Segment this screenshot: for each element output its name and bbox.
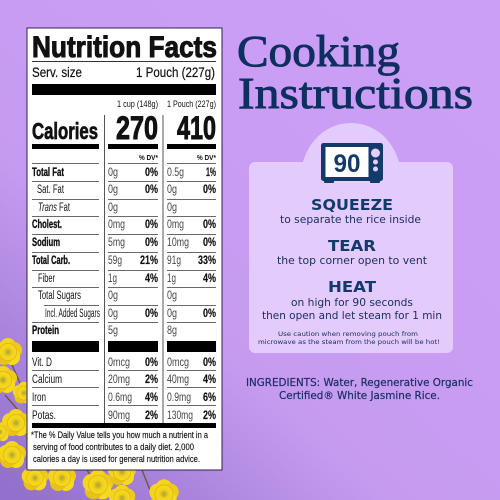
step: tear: the top corner open to vent <box>277 255 427 267</box>
percent: cup column: 0% <box>145 184 158 196</box>
nutrient labels <box>32 167 100 422</box>
step: squeeze: to separate the rice inside <box>280 214 421 226</box>
nutrient labels: Total Sugars <box>38 290 81 302</box>
amounts: pouch column: 10mg <box>167 237 189 249</box>
percent: pouch column: 2% <box>203 410 216 422</box>
amounts: cup column: 5g <box>108 325 118 337</box>
amounts: pouch column: 1g <box>167 273 176 285</box>
step: tear <box>277 237 427 267</box>
amounts: pouch column: 0.9mg <box>167 392 191 404</box>
panel: nutrition facts <box>27 28 222 470</box>
amounts: cup column: 59g <box>108 255 122 267</box>
daily value header: % DV* <box>197 153 216 162</box>
percent: pouch column: 0% <box>203 219 216 231</box>
icon: microwave <box>321 143 383 183</box>
serving size: Serv. size <box>32 64 82 80</box>
amounts: pouch column: 0mcg <box>167 357 189 369</box>
daily value header: % DV* <box>139 153 158 162</box>
step: tear: TEAR <box>328 237 376 255</box>
amounts: cup column: 0g <box>108 308 118 320</box>
percent: pouch column: 33% <box>198 255 216 267</box>
percent: pouch column: 0% <box>203 357 216 369</box>
percent: cup column: 4% <box>145 392 158 404</box>
amounts: cup column: 0g <box>108 290 118 302</box>
nutrient labels: Cholest. <box>32 219 62 231</box>
ingredients: Certified® White Jasmine Rice. <box>279 390 440 402</box>
percent: pouch column: 4% <box>203 374 216 386</box>
amounts: cup column: 1g <box>108 273 117 285</box>
step: heat: HEAT <box>328 278 376 296</box>
amounts: pouch column: 8g <box>167 325 177 337</box>
calories row: 410 <box>177 110 216 146</box>
percent: cup column: 4% <box>145 273 158 285</box>
icon: microwave: 90 <box>334 150 360 178</box>
percent: pouch column: 0% <box>203 184 216 196</box>
percent: cup column: 0% <box>145 357 158 369</box>
nutrient labels: Iron <box>32 392 46 404</box>
footnote <box>31 430 209 465</box>
amounts: pouch column: 0g <box>167 290 177 302</box>
flowers <box>0 338 179 500</box>
percent: cup column: 21% <box>140 255 158 267</box>
column headers: 1 Pouch (227g) <box>167 99 216 110</box>
percent: cup column: 0% <box>145 167 158 179</box>
amounts: pouch column: 130mg <box>167 410 193 422</box>
amounts: cup column: 0g <box>108 167 118 179</box>
percent: cup column: 2% <box>145 410 158 422</box>
calories row: 270 <box>116 110 158 146</box>
black divider bars <box>32 341 216 428</box>
percent: pouch column: 0% <box>203 308 216 320</box>
percent: cup column: 0% <box>145 308 158 320</box>
title: cooking instructions: Instructions <box>238 69 473 118</box>
serving size <box>32 64 215 80</box>
amounts: pouch column: 0.5g <box>167 167 184 179</box>
step: squeeze: SQUEEZE <box>311 196 393 214</box>
percent: pouch column: 6% <box>203 392 216 404</box>
percent: pouch column: 0% <box>203 237 216 249</box>
column headers: 1 cup (148g) <box>117 99 158 110</box>
title: cooking instructions: Cooking <box>237 27 400 76</box>
amounts: cup column: 0.6mg <box>108 392 132 404</box>
amounts: pouch column: 40mg <box>167 374 189 386</box>
serving size: 1 Pouch (227g) <box>136 64 215 80</box>
ingredients: INGREDIENTS: Water, Regenerative Organic <box>246 377 473 389</box>
footnote: calories a day is used for general nutrition advice. <box>33 454 200 465</box>
caution note: microwave as the steam from the pouch will be hot! <box>258 338 440 346</box>
row rules <box>32 163 216 406</box>
amounts: cup column: 90mg <box>108 410 130 422</box>
footnote: *The % Daily Value tells you how much a nutrient in a <box>31 430 209 441</box>
amounts: cup column: 5mg <box>108 237 125 249</box>
amounts: pouch column: 0g <box>167 184 177 196</box>
step: heat: then open and let steam for 1 min <box>262 310 442 322</box>
calories row <box>32 110 216 146</box>
percent: pouch column <box>198 167 216 422</box>
title: cooking instructions <box>237 27 473 118</box>
nutrient labels: Incl. Added Sugars <box>45 308 100 320</box>
nutrient labels: Total Carb. <box>32 255 70 267</box>
amounts: pouch column <box>167 167 193 422</box>
amounts: cup column <box>108 167 132 422</box>
percent: cup column: 0% <box>145 219 158 231</box>
amounts: pouch column: 0g <box>167 308 177 320</box>
amounts: cup column: 0g <box>108 184 118 196</box>
caution note <box>258 330 440 346</box>
footnote: serving of food contributes to a daily diet. 2,000 <box>33 442 194 453</box>
panel: instructions card <box>249 123 453 353</box>
ingredients <box>246 377 473 402</box>
percent: cup column: 2% <box>145 374 158 386</box>
step: heat <box>262 278 442 322</box>
amounts: cup column: 0mg <box>108 219 125 231</box>
nutrient labels: Potas. <box>32 410 56 422</box>
nutrient labels: Protein <box>32 325 59 337</box>
column headers <box>117 99 216 110</box>
amounts: cup column: 0mcg <box>108 357 130 369</box>
amounts: pouch column: 0g <box>167 202 177 214</box>
daily value header <box>139 153 216 162</box>
percent: pouch column: 4% <box>203 273 216 285</box>
caution note: Use caution when removing pouch from <box>278 330 418 338</box>
step: heat: on high for 90 seconds <box>291 297 413 309</box>
nutrient labels: Sodium <box>32 237 60 249</box>
nutrient labels: Calcium <box>32 374 62 386</box>
amounts: cup column: 0g <box>108 202 118 214</box>
calories row: Calories <box>32 118 98 144</box>
percent: cup column <box>140 167 158 422</box>
heading: nutrition facts: Nutrition Facts <box>32 31 217 64</box>
nutrient labels: Trans Fat <box>38 202 71 214</box>
step: squeeze <box>280 196 421 226</box>
amounts: cup column: 20mg <box>108 374 130 386</box>
percent: cup column: 0% <box>145 237 158 249</box>
percent: pouch column: 1% <box>206 167 216 179</box>
nutrient labels: Total Fat <box>32 167 64 179</box>
amounts: pouch column: 0mg <box>167 219 184 231</box>
nutrient labels: Sat. Fat <box>37 184 65 196</box>
amounts: pouch column: 91g <box>167 255 181 267</box>
nutrient labels: Fiber <box>38 273 55 285</box>
nutrient labels: Vit. D <box>32 357 52 369</box>
